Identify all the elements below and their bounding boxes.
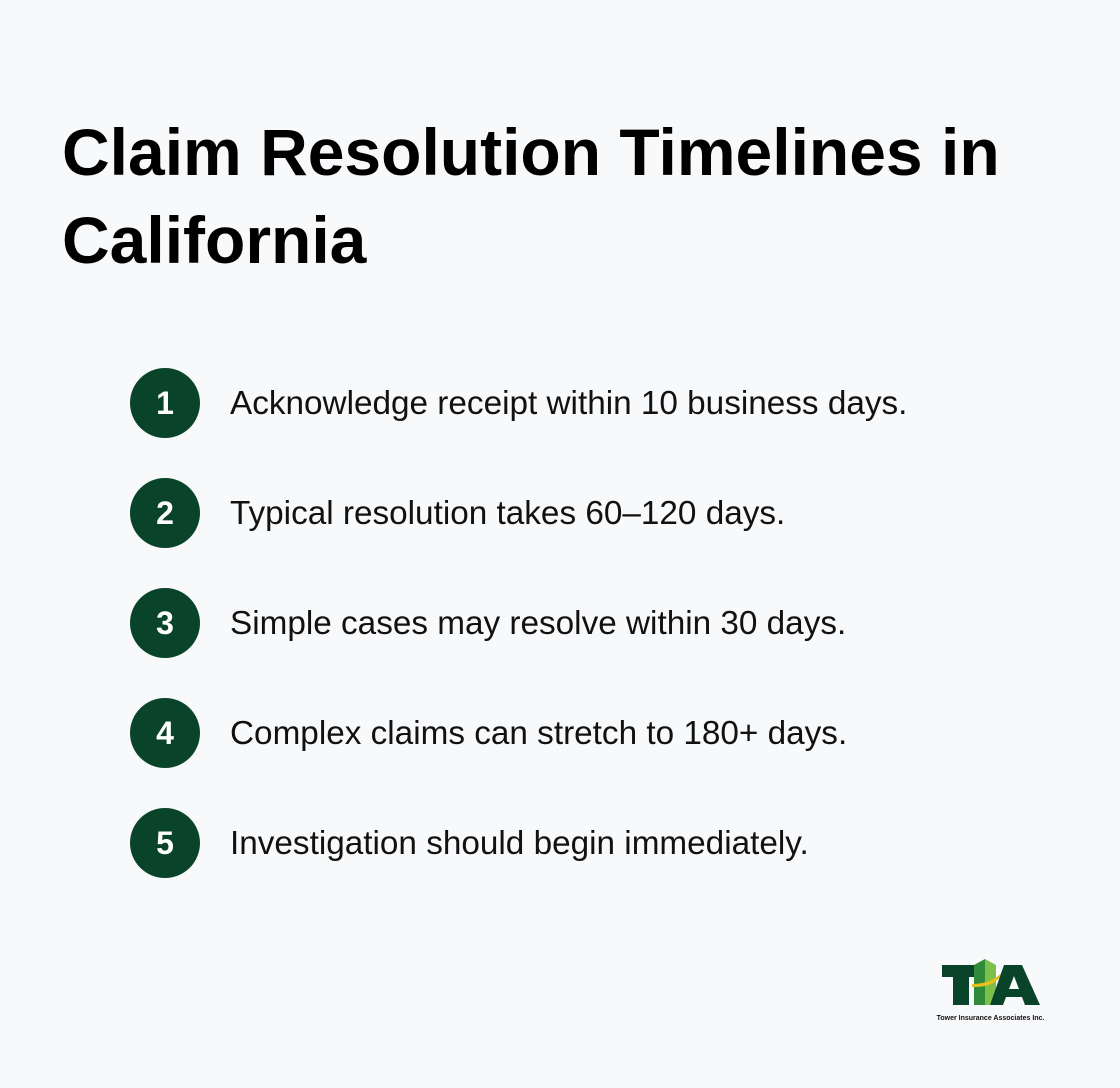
item 1	[130, 368, 907, 438]
item 2: 2	[156, 495, 174, 531]
item 5: 5	[156, 825, 174, 861]
title: Claim Resolution Timelines in	[62, 115, 1000, 189]
item 1: Acknowledge receipt within 10 business days.	[230, 385, 907, 422]
item 5: Investigation should begin immediately.	[230, 825, 809, 862]
item 4: 4	[156, 715, 174, 751]
item 1: 1	[156, 385, 174, 421]
item 5	[130, 808, 809, 878]
title	[62, 115, 1000, 277]
logo	[936, 959, 1044, 1022]
item 3: Simple cases may resolve within 30 days.	[230, 605, 846, 642]
logo: Tower Insurance Associates Inc.	[937, 1015, 1044, 1022]
item 2	[130, 478, 785, 548]
item 4	[130, 698, 847, 768]
item 3	[130, 588, 846, 658]
item 3: 3	[156, 605, 174, 641]
item 4: Complex claims can stretch to 180+ days.	[230, 715, 847, 752]
item 2: Typical resolution takes 60–120 days.	[230, 495, 785, 532]
title: California	[62, 203, 366, 277]
